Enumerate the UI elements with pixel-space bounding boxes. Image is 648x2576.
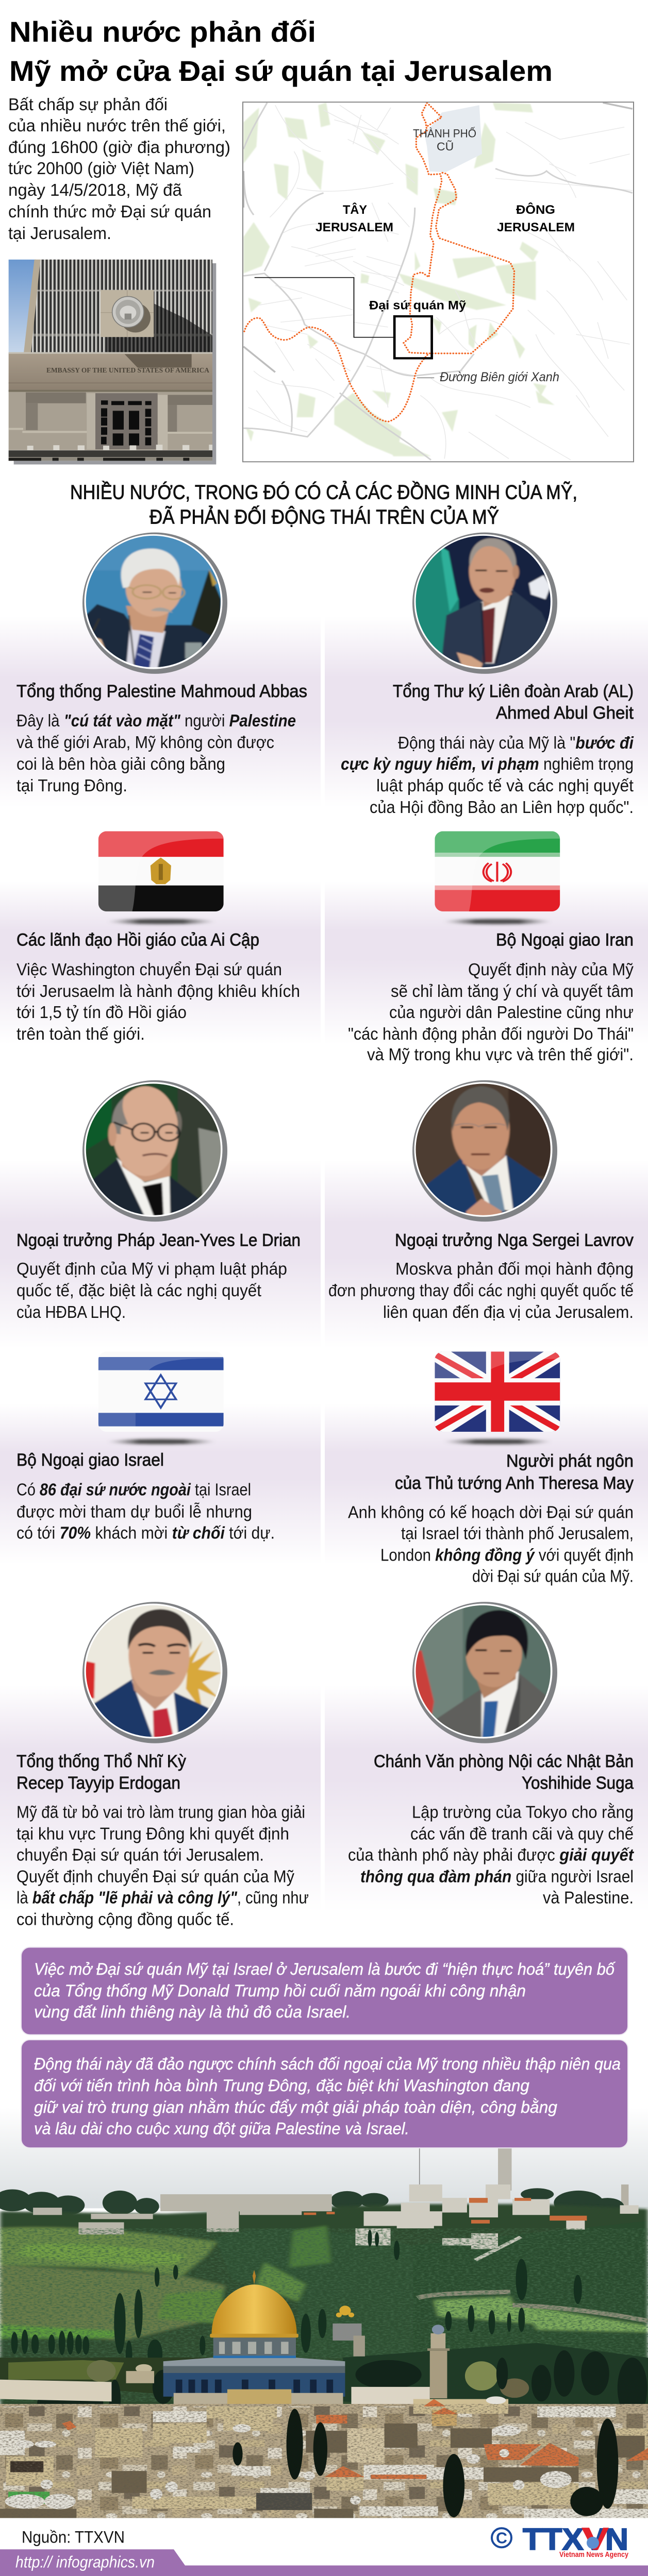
text: Egypt: trên toàn thế giới. bbox=[16, 1025, 145, 1044]
callout: purple box 2 bbox=[21, 2040, 628, 2148]
hillside base bbox=[0, 2204, 648, 2416]
map: embassy locator square bbox=[394, 316, 432, 358]
text: Lavrov bbox=[328, 1231, 634, 1322]
text: Israel: Có 86 đại sứ nước ngoài tại Israel bbox=[16, 1481, 251, 1500]
map label: East Jerusalem bbox=[497, 202, 575, 234]
title bbox=[9, 16, 553, 87]
logo: TTXVN: C bbox=[496, 2530, 507, 2547]
map: Green Line dotted border bbox=[244, 103, 514, 421]
text: Israel: Bộ Ngoại giao Israel bbox=[16, 1451, 164, 1470]
text: Erdogan: Mỹ đã từ bỏ vai trò làm trung gian hòa giải bbox=[16, 1803, 305, 1822]
text: Mahmoud Abbas: và thế giới Arab, Mỹ không còn được bbox=[16, 733, 274, 752]
flag: Israel bbox=[98, 1351, 224, 1444]
text: United Kingdom: Người phát ngôn bbox=[506, 1451, 634, 1471]
callout: purple box 2: Động thái này đã đảo ngược chính sách đối ngoại của Mỹ trong nhiều thập niên qua bbox=[34, 2054, 621, 2073]
text: Erdogan: chuyển Đại sứ quán tới Jerusalem. bbox=[16, 1846, 264, 1865]
text: Egypt: Việc Washington chuyển Đại sứ quán bbox=[16, 961, 282, 979]
logo: TTXVN: Vietnam News Agency bbox=[559, 2551, 629, 2559]
text: Mahmoud Abbas: Tổng thống Palestine Mahmoud Abbas bbox=[16, 682, 307, 701]
callout: purple box 1: vùng đất linh thiêng này là thủ đô của Israel. bbox=[34, 2003, 351, 2021]
minaret bbox=[427, 2325, 450, 2398]
text: Erdogan: coi thường cộng đồng quốc tế. bbox=[16, 1910, 234, 1929]
text: United Kingdom: London không đồng ý với quyết định bbox=[380, 1546, 634, 1565]
hilltop buildings bbox=[33, 2194, 332, 2234]
panel background: row 1 bbox=[0, 616, 648, 807]
map label: West Jerusalem: JERUSALEM bbox=[315, 221, 393, 234]
logo: TTXVN: TTXVN bbox=[523, 2522, 628, 2556]
text: Erdogan: là bất chấp "lẽ phải và công lý", cũng như bbox=[16, 1889, 309, 1907]
footer band: http:// infographics.vn bbox=[15, 2553, 155, 2571]
text: Mahmoud Abbas: coi là bên hòa giải công bằng bbox=[16, 754, 225, 774]
callout: purple box 1 bbox=[21, 1947, 628, 2035]
intro text bbox=[8, 95, 230, 243]
photo: Jerusalem skyline with Dome of the Rock bbox=[0, 2108, 648, 2518]
section heading bbox=[70, 481, 577, 528]
map: streets bbox=[248, 105, 633, 460]
text: Ahmed Abul Gheit: Ahmed Abul Gheit bbox=[496, 704, 634, 723]
photo: US embassy building bbox=[9, 260, 216, 465]
mottled foliage texture bbox=[0, 2228, 648, 2401]
callout: purple box 1: Việc mở Đại sứ quán Mỹ tại Israel ở Jerusalem là bước đi “hiện thực hoá” tuyên bố bbox=[34, 1960, 616, 1978]
text: Suga: của thành phố này phải được giải quyết bbox=[348, 1846, 635, 1865]
footer band bbox=[0, 2549, 648, 2576]
portrait: Yoshihide Suga bbox=[409, 1599, 558, 1743]
text: Suga: Yoshihide Suga bbox=[522, 1773, 634, 1793]
text: Ahmed Abul Gheit: Động thái này của Mỹ là "bước đi bbox=[398, 734, 634, 753]
callout: purple box 1: của Tổng thống Mỹ Donald Trump hồi cuối năm ngoái khi công nhận bbox=[34, 1981, 526, 2000]
portrait: Jean-Yves Le Drian bbox=[78, 1077, 227, 1222]
text: Ahmed Abul Gheit: luật pháp quốc tế và các nghị quyết bbox=[376, 776, 634, 795]
map label: old city: CŨ bbox=[437, 140, 454, 153]
portrait: Ahmed Abul Gheit bbox=[409, 529, 558, 674]
callout: purple box 2: đối với tiến trình hòa bình Trung Đông, đặc biệt khi Washington đang bbox=[34, 2076, 529, 2095]
text: Iran: sẽ chỉ làm tăng ý chí và quyết tâm bbox=[391, 982, 634, 1001]
map label: US embassy: Đại sứ quán Mỹ bbox=[369, 299, 466, 312]
text: Le Drian: Quyết định của Mỹ vi phạm luật pháp bbox=[16, 1260, 287, 1279]
Dome of the Rock bbox=[163, 2270, 345, 2405]
text: Israel: có tới 70% khách mời từ chối tới dự. bbox=[16, 1524, 275, 1543]
old city buildings bbox=[0, 2404, 648, 2518]
text: Iran bbox=[348, 930, 634, 1064]
text: Le Drian bbox=[16, 1231, 301, 1322]
text: Lavrov: Moskva phản đối mọi hành động bbox=[395, 1260, 634, 1279]
title: Mỹ mở cửa Đại sứ quán tại Jerusalem bbox=[9, 55, 553, 87]
portrait: Sergei Lavrov bbox=[409, 1077, 558, 1222]
other dome bbox=[333, 2306, 365, 2357]
cypress rows bbox=[11, 2230, 582, 2370]
text: Erdogan bbox=[16, 1752, 309, 1929]
flag: Iran bbox=[435, 831, 560, 924]
panel background: row 2 bbox=[0, 882, 648, 1044]
callout: purple box 2: và lâu dài cho cuộc xung đột giữa Palestine và Israel. bbox=[34, 2119, 409, 2138]
map: parks and green areas bbox=[243, 103, 555, 456]
map label: old city bbox=[413, 127, 476, 153]
text: Egypt: tới Jerusaelm là hành động khiêu khích bbox=[16, 982, 300, 1001]
flag: United Kingdom bbox=[435, 1351, 560, 1444]
map: Jerusalem with Green Line bbox=[243, 101, 634, 462]
map label: West Jerusalem: TÂY bbox=[343, 202, 368, 217]
intro text: đúng 16h00 (giờ địa phương) bbox=[8, 138, 230, 157]
panel background: row 5 bbox=[0, 1685, 648, 1911]
text: Egypt bbox=[16, 930, 300, 1044]
section heading: NHIỀU NƯỚC, TRONG ĐÓ CÓ CẢ CÁC ĐỒNG MINH CỦA MỸ, bbox=[70, 481, 577, 503]
intro text: chính thức mở Đại sứ quán bbox=[8, 202, 211, 222]
title: Nhiều nước phản đối bbox=[9, 16, 316, 48]
text: Iran: Quyết định này của Mỹ bbox=[468, 961, 634, 979]
text: Le Drian: quốc tế, đặc biệt là các nghị quyết bbox=[16, 1281, 262, 1300]
text: Le Drian: Ngoại trưởng Pháp Jean-Yves Le Drian bbox=[16, 1231, 301, 1250]
text: Mahmoud Abbas: Đây là "cú tát vào mặt" người Palestine bbox=[16, 711, 296, 731]
text: Ahmed Abul Gheit bbox=[341, 682, 634, 817]
text: United Kingdom bbox=[348, 1451, 634, 1586]
map label: Green Line: Đường Biên giới Xanh bbox=[440, 370, 559, 384]
lower tree belt bbox=[0, 2358, 215, 2394]
portrait: Recep Tayyip Erdogan bbox=[78, 1599, 227, 1743]
map: connector line bbox=[255, 278, 394, 337]
intro text: tức 20h00 (giờ Việt Nam) bbox=[8, 159, 194, 178]
walled platform bbox=[0, 2380, 111, 2401]
embassy lettering: EMBASSY OF THE UNITED STATES OF AMERICA bbox=[46, 366, 209, 374]
text: Le Drian: của HĐBA LHQ. bbox=[16, 1303, 126, 1322]
text: Iran: Bộ Ngoại giao Iran bbox=[496, 930, 634, 950]
text: Mahmoud Abbas: tại Trung Đông. bbox=[16, 776, 127, 795]
section heading: ĐÃ PHẢN ĐỐI ĐỘNG THÁI TRÊN CỦA MỸ bbox=[149, 505, 499, 528]
map: leader line bbox=[417, 377, 434, 378]
text: Israel: được mời tham dự buổi lễ nhưng bbox=[16, 1502, 252, 1522]
text: Erdogan: Tổng thống Thổ Nhĩ Kỳ bbox=[16, 1752, 187, 1771]
text: Suga: và Palestine. bbox=[543, 1889, 634, 1907]
panel background: row 3 bbox=[0, 1160, 648, 1348]
text: Suga bbox=[348, 1752, 635, 1907]
text: Israel bbox=[16, 1451, 275, 1543]
text: Egypt: tới 1,5 tỷ tín đồ Hồi giáo bbox=[16, 1004, 187, 1022]
source: Nguồn: TTXVN bbox=[22, 2528, 125, 2546]
text: Erdogan: tại khu vực Trung Đông khi quyết định bbox=[16, 1825, 289, 1843]
map: old city bbox=[424, 105, 482, 172]
flag: Egypt bbox=[98, 831, 224, 924]
callout: purple box 2: giữ vai trò trung gian nhằm thúc đẩy một giải pháp toàn diện, công bằng bbox=[34, 2097, 557, 2116]
skyline trees bbox=[0, 2188, 624, 2215]
map label: East Jerusalem: JERUSALEM bbox=[497, 221, 575, 234]
text: Suga: thông qua đàm phán giữa người Israel bbox=[360, 1868, 634, 1886]
intro text: tại Jerusalem. bbox=[8, 224, 111, 243]
text: Erdogan: Quyết định chuyển Đại sứ quán của Mỹ bbox=[16, 1868, 294, 1886]
map label: East Jerusalem: ĐÔNG bbox=[516, 202, 555, 217]
text: Erdogan: Recep Tayyip Erdogan bbox=[16, 1773, 180, 1793]
text: Mahmoud Abbas bbox=[16, 682, 307, 795]
intro text: ngày 14/5/2018, Mỹ đã bbox=[8, 181, 182, 200]
portrait: Mahmoud Abbas bbox=[78, 529, 227, 674]
map label: West Jerusalem bbox=[315, 202, 393, 234]
text: Egypt: Các lãnh đạo Hồi giáo của Ai Cập bbox=[16, 930, 259, 950]
map label: old city: THÀNH PHỐ bbox=[413, 127, 476, 140]
intro text: Bất chấp sự phản đối bbox=[8, 95, 168, 114]
text: Ahmed Abul Gheit: cực kỳ nguy hiểm, vi phạm nghiêm trọng bbox=[341, 755, 634, 774]
panel background: row 4 bbox=[0, 1403, 648, 1565]
intro text: của nhiều nước trên thế giới, bbox=[8, 116, 226, 135]
